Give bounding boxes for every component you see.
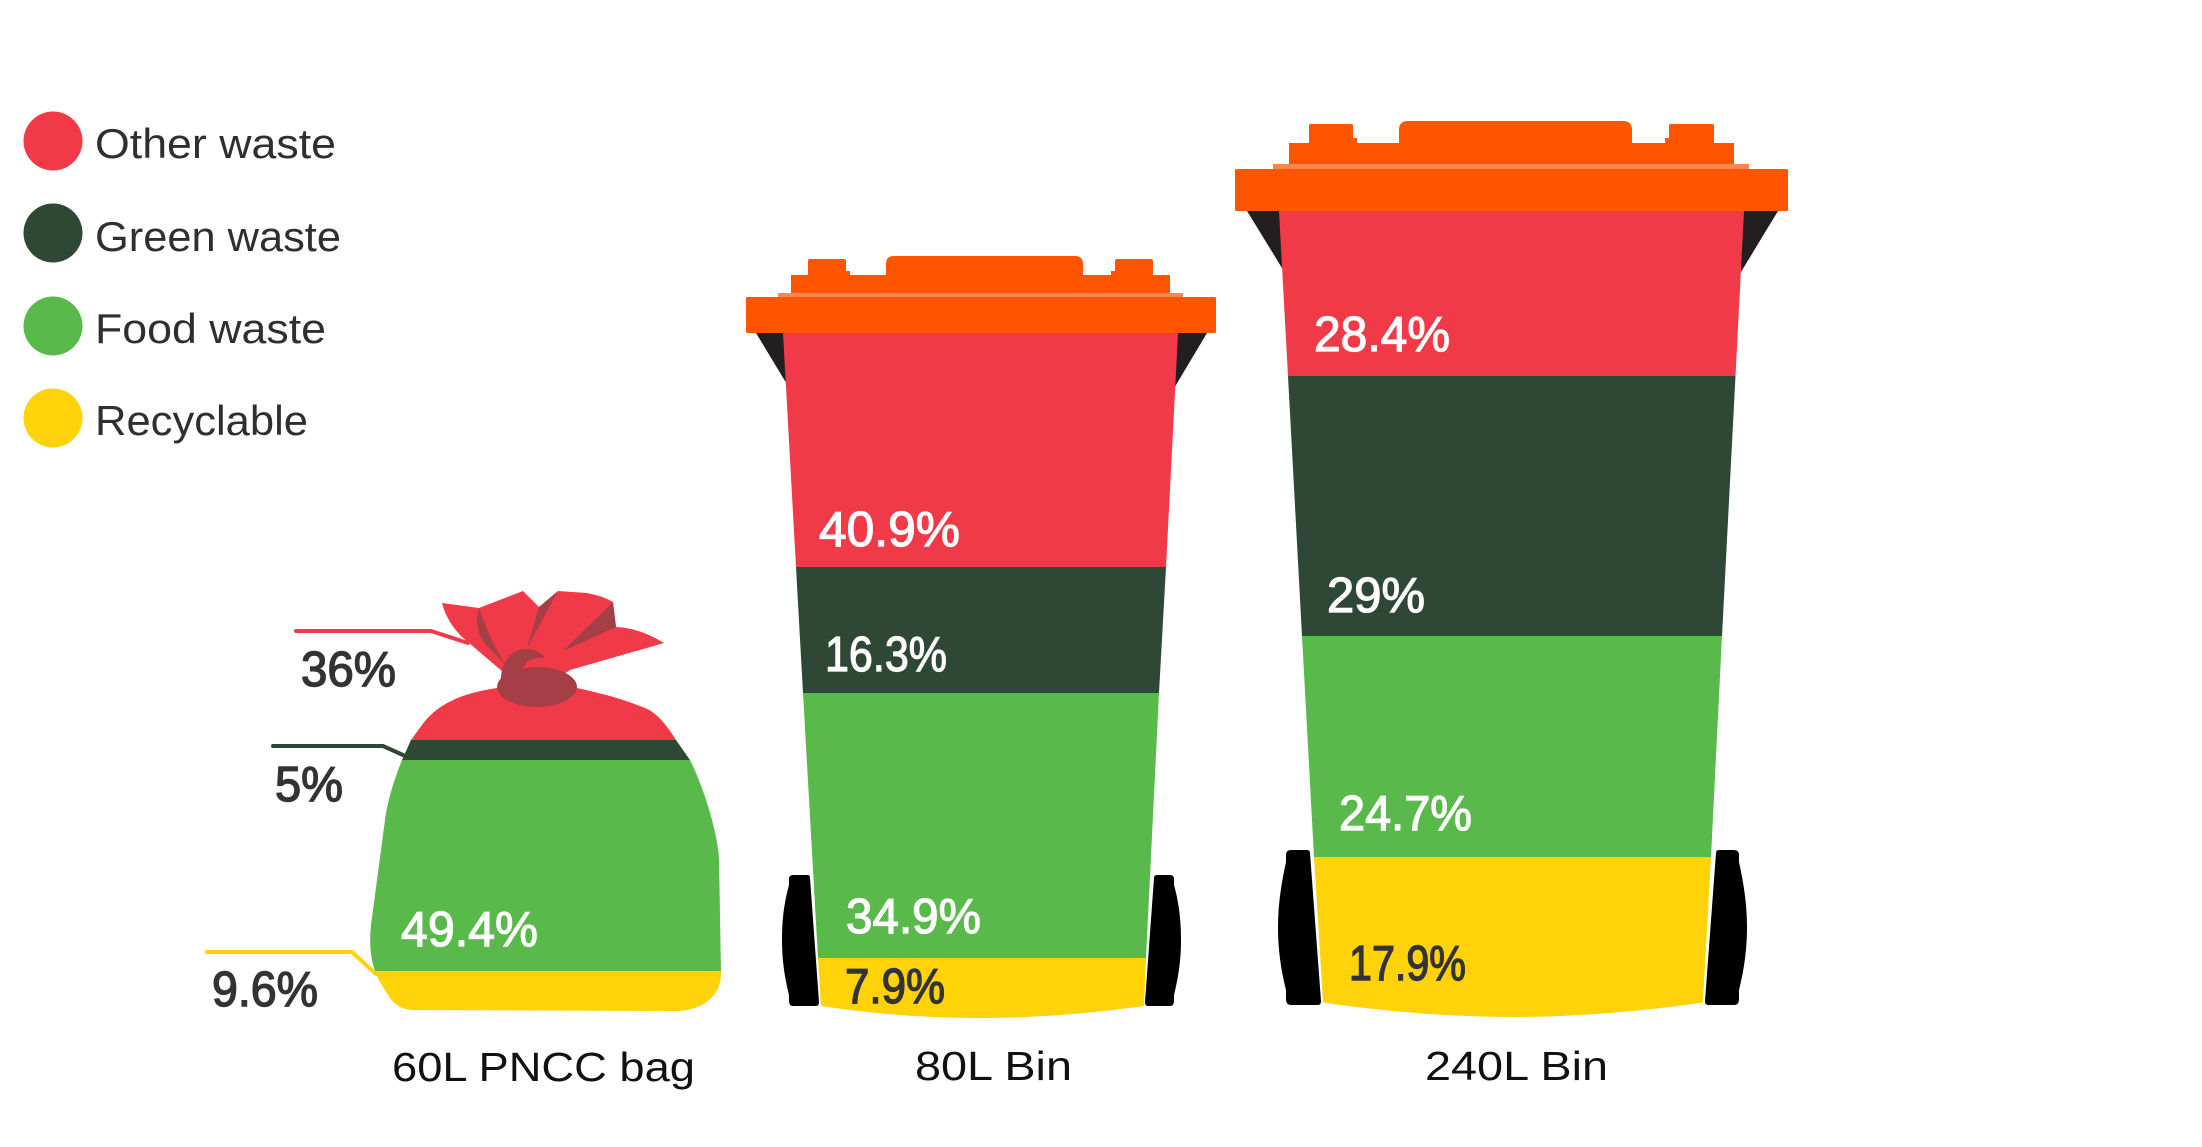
label: 40.9%: 40.9% [819, 503, 960, 557]
legend item: food waste [24, 296, 326, 356]
bag body layers [360, 680, 730, 1016]
bin body: recyclable layer [1314, 857, 1711, 1017]
hinge brackets [756, 333, 1207, 392]
label: 29%: 29% [1327, 569, 1425, 623]
legend item: other waste [24, 112, 336, 170]
bag knot [497, 649, 577, 707]
240L bin [1235, 121, 1788, 1089]
label: 49.4%: 49.4% [401, 903, 538, 957]
leader line: other waste [296, 631, 468, 643]
label: 28.4%: 28.4% [1314, 308, 1450, 362]
bin body: food waste layer [803, 693, 1159, 958]
bin body: food waste layer [1302, 636, 1722, 857]
leader line: recyclable [207, 952, 376, 974]
bin body: green waste layer [1288, 376, 1736, 636]
label: 7.9%: 7.9% [845, 960, 945, 1014]
wheels [1278, 850, 1747, 1005]
wheels [782, 875, 1181, 1006]
lid [1235, 121, 1788, 211]
legend item: other waste: Other waste [95, 120, 336, 167]
legend item: recyclable [24, 388, 308, 448]
bin body: green waste layer [796, 567, 1166, 693]
legend item: recyclable: Recyclable [95, 397, 308, 444]
legend item: food waste: Food waste [95, 305, 326, 352]
bin body: other waste layer [1279, 211, 1744, 376]
legend [24, 112, 341, 448]
bin body: recyclable layer [818, 958, 1146, 1018]
80L bin [746, 256, 1216, 1089]
bag tie [442, 591, 664, 690]
label: 17.9%: 17.9% [1349, 937, 1466, 991]
label: 34.9%: 34.9% [846, 890, 981, 944]
leader line: green waste [273, 746, 403, 755]
label: 9.6%: 9.6% [212, 963, 318, 1017]
hinge brackets [1247, 211, 1778, 277]
bin body: other waste layer [783, 333, 1178, 567]
legend item: green waste [24, 204, 341, 262]
label: 36%: 36% [301, 643, 396, 697]
label: 5%: 5% [275, 758, 343, 812]
caption: 60L PNCC bag: 60L PNCC bag [392, 1044, 695, 1090]
caption: 80L Bin: 80L Bin [915, 1043, 1072, 1089]
caption: 240L Bin: 240L Bin [1425, 1043, 1608, 1089]
label: 24.7%: 24.7% [1339, 787, 1472, 841]
legend item: green waste: Green waste [95, 213, 341, 260]
60L PNCC bag [207, 591, 730, 1090]
lid [746, 256, 1216, 333]
label: 16.3%: 16.3% [825, 628, 947, 682]
